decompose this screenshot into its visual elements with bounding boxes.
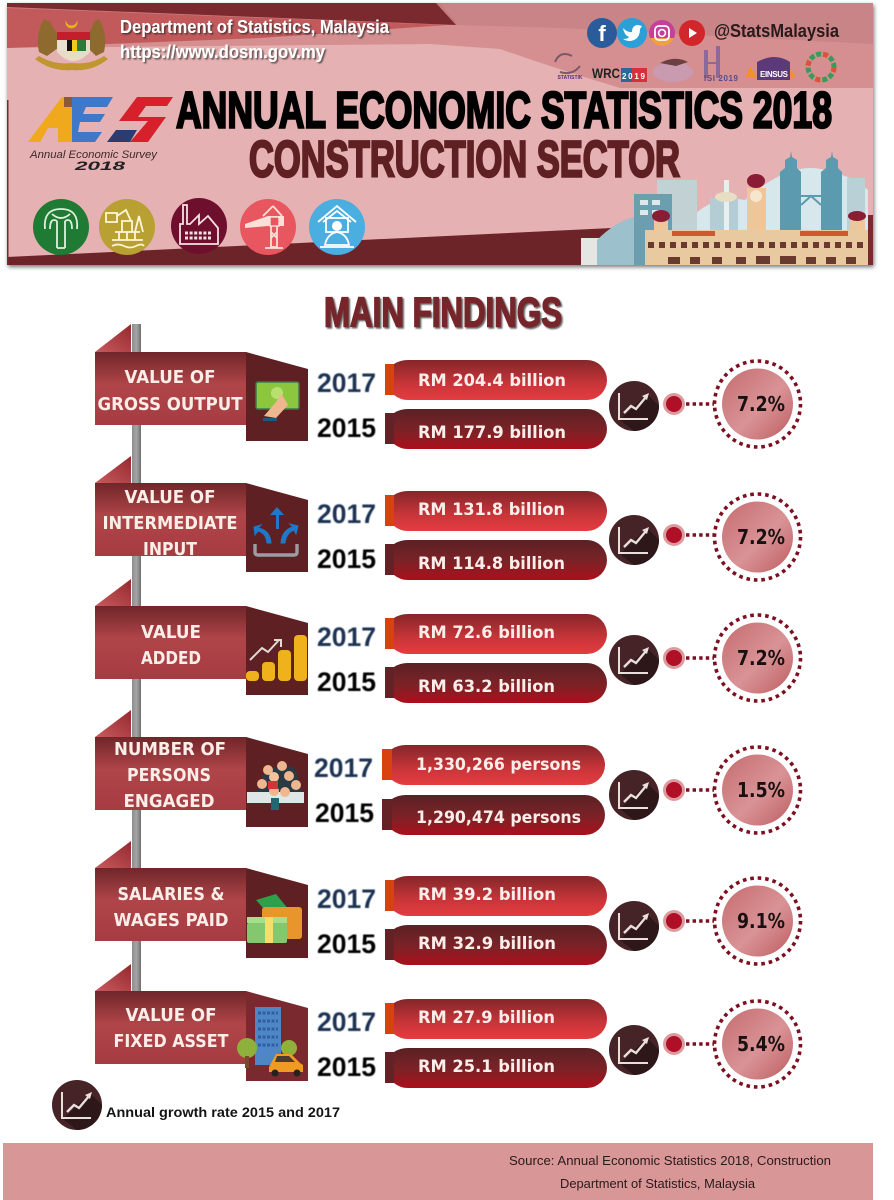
years bbox=[317, 499, 376, 574]
growth rate: 9.1% bbox=[737, 909, 785, 933]
banner flag: WAGES PAID bbox=[114, 910, 228, 931]
value pills: RM 114.8 billion bbox=[418, 554, 565, 574]
years bbox=[317, 368, 376, 443]
years: 2015 bbox=[317, 929, 376, 959]
banner flag: ADDED bbox=[141, 648, 201, 669]
icon: construction crane bbox=[240, 199, 296, 255]
banner flag: INPUT bbox=[143, 539, 198, 560]
growth rate: 7.2% bbox=[737, 646, 785, 670]
row: value of gross output bbox=[95, 324, 800, 449]
years: 2015 bbox=[317, 1052, 376, 1082]
header organisation text: Department of Statistics, Malaysia bbox=[120, 17, 390, 37]
growth rate bbox=[609, 615, 800, 701]
value pills: RM 63.2 billion bbox=[418, 677, 555, 697]
partner logos: STATISTIK bbox=[557, 75, 583, 81]
banner flag bbox=[95, 456, 246, 560]
icon: mining rig bbox=[99, 199, 155, 255]
icon: output arrows bbox=[246, 483, 308, 572]
row: value of intermediate input bbox=[95, 456, 800, 580]
banner flag: PERSONS bbox=[127, 765, 211, 786]
years: 2017 bbox=[317, 499, 376, 529]
row: number of persons engaged bbox=[95, 710, 800, 835]
partner logos: WRC bbox=[592, 65, 620, 81]
footer source panel: Source: Annual Economic Statistics 2018, Construction bbox=[509, 1154, 831, 1168]
legend: Annual growth rate 2015 and 2017 bbox=[106, 1104, 340, 1120]
banner flag: ENGAGED bbox=[124, 791, 214, 812]
banner flag: VALUE OF bbox=[126, 1005, 216, 1026]
value pills: RM 32.9 billion bbox=[418, 934, 556, 954]
skyline illustration bbox=[581, 151, 873, 265]
years: 2015 bbox=[315, 798, 374, 828]
partner logos: EINSUS bbox=[760, 70, 789, 79]
icon: factory bbox=[171, 198, 227, 254]
value pills bbox=[385, 614, 607, 703]
legend bbox=[52, 1080, 340, 1130]
header organisation text: https://www.dosm.gov.my bbox=[120, 42, 325, 62]
row: value added bbox=[95, 579, 800, 703]
timeline pole bbox=[132, 324, 141, 994]
years: 2017 bbox=[317, 368, 376, 398]
banner flag bbox=[95, 710, 246, 812]
value pills: RM 204.4 billion bbox=[418, 371, 566, 391]
value pills bbox=[385, 876, 607, 965]
icon: agriculture palm bbox=[33, 199, 89, 255]
icon: house and person bbox=[309, 199, 365, 255]
growth rate bbox=[609, 1001, 800, 1087]
value pills: RM 177.9 billion bbox=[418, 423, 566, 443]
heading: main findings: MAIN FINDINGS bbox=[324, 288, 562, 336]
years: 2017 bbox=[314, 753, 373, 783]
value pills: RM 27.9 billion bbox=[418, 1008, 555, 1028]
icon: gold coins chart bbox=[246, 606, 308, 695]
icon: building, trees and car bbox=[237, 991, 308, 1081]
row: value of fixed asset bbox=[95, 964, 800, 1088]
banner flag: INTERMEDIATE bbox=[102, 513, 238, 534]
value pills bbox=[385, 491, 607, 580]
icon: cash in hand bbox=[246, 352, 308, 441]
AES logo: Annual Economic Survey bbox=[29, 149, 159, 161]
footer source panel: Department of Statistics, Malaysia bbox=[560, 1177, 755, 1191]
years: 2015 bbox=[317, 544, 376, 574]
banner flag: NUMBER OF bbox=[114, 739, 226, 760]
icon: wallet and cash bbox=[246, 868, 308, 958]
banner flag bbox=[95, 964, 246, 1064]
banner flag: VALUE OF bbox=[124, 367, 216, 388]
years bbox=[317, 884, 376, 959]
banner flag bbox=[95, 579, 246, 679]
banner flag: VALUE bbox=[141, 622, 201, 643]
social media icons bbox=[587, 18, 705, 48]
years: 2015 bbox=[317, 413, 376, 443]
value pills bbox=[385, 999, 607, 1088]
growth rate: 5.4% bbox=[737, 1032, 785, 1056]
growth rate bbox=[609, 747, 800, 833]
banner flag: GROSS OUTPUT bbox=[98, 394, 243, 415]
value pills bbox=[385, 360, 607, 449]
icon: group of people bbox=[246, 737, 308, 827]
growth rate bbox=[609, 878, 800, 964]
header organisation text bbox=[120, 17, 390, 62]
footer source panel bbox=[3, 1143, 873, 1200]
subtitle: CONSTRUCTION SECTOR bbox=[249, 130, 680, 188]
growth rate bbox=[609, 494, 800, 580]
icon: Malaysia coat of arms bbox=[35, 19, 108, 70]
value pills: 1,330,266 persons bbox=[416, 755, 581, 775]
value pills: RM 25.1 billion bbox=[418, 1057, 555, 1077]
partner logos: 2019 bbox=[622, 72, 646, 81]
growth rate: 7.2% bbox=[737, 392, 785, 416]
partner logos bbox=[555, 46, 834, 83]
row: salaries and wages paid bbox=[95, 841, 800, 965]
sector icons bbox=[33, 198, 365, 255]
growth rate: 1.5% bbox=[737, 778, 785, 802]
value pills: RM 39.2 billion bbox=[418, 885, 556, 905]
social media icons: f bbox=[598, 21, 606, 46]
banner flag bbox=[95, 324, 246, 425]
social handle: @StatsMalaysia bbox=[714, 21, 840, 41]
years bbox=[317, 622, 376, 697]
header banner bbox=[7, 3, 873, 265]
partner logos: ISI 2019 bbox=[704, 74, 739, 83]
growth rate bbox=[609, 361, 800, 447]
banner flag bbox=[95, 841, 246, 941]
years: 2017 bbox=[317, 622, 376, 652]
banner flag: FIXED ASSET bbox=[114, 1031, 229, 1052]
banner flag: VALUE OF bbox=[124, 487, 216, 508]
AES logo: 2018 bbox=[73, 159, 126, 173]
value pills: RM 72.6 billion bbox=[418, 623, 555, 643]
years: 2017 bbox=[317, 1007, 376, 1037]
value pills: RM 131.8 billion bbox=[418, 500, 565, 520]
banner flag: SALARIES & bbox=[118, 884, 224, 905]
growth rate: 7.2% bbox=[737, 525, 785, 549]
years bbox=[314, 753, 374, 828]
AES logo bbox=[28, 97, 173, 173]
years: 2017 bbox=[317, 884, 376, 914]
years: 2015 bbox=[317, 667, 376, 697]
years bbox=[317, 1007, 376, 1082]
value pills: 1,290,474 persons bbox=[416, 808, 581, 828]
value pills bbox=[382, 745, 605, 835]
